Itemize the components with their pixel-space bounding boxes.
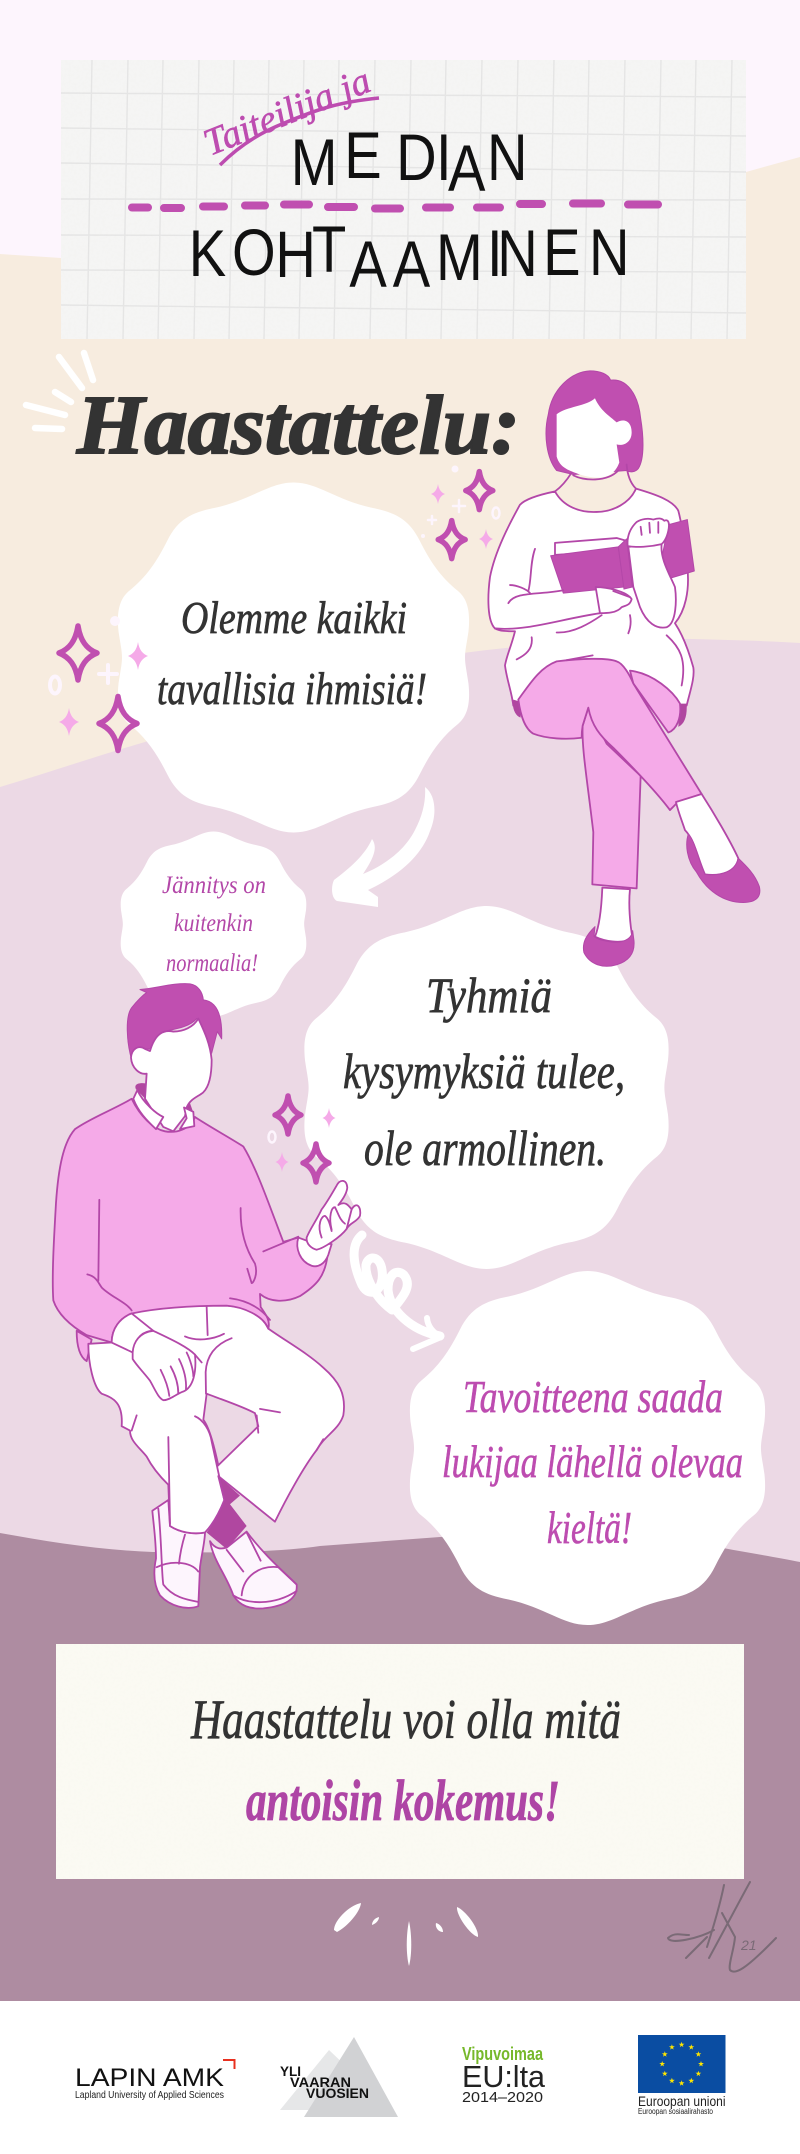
arrow: from bubble 1 to bubble 2 — [332, 787, 434, 907]
logo: Vipuvoimaa EU:lta — [462, 2044, 546, 2106]
closing text line 1: Haastattelu voi olla mitä — [190, 1689, 621, 1751]
bubble 4 text: kieltä! — [547, 1502, 632, 1553]
woman thigh behind and seat shadow — [513, 671, 687, 733]
woman clothing lines — [495, 522, 683, 686]
logo: European Union flag: Euroopan sosiaalirahasto — [638, 2107, 713, 2116]
man sweater lines — [87, 1200, 298, 1320]
man resting hand — [133, 1331, 195, 1400]
man face — [131, 1019, 212, 1131]
title small: Taiteilija ja: Taiteilija ja — [198, 59, 377, 164]
logo: Yli vaaran vuosien: VUOSIEN — [306, 2086, 369, 2101]
bubble 3 text: ole armollinen. — [364, 1120, 606, 1176]
arrow: squiggle to bubble 4 — [354, 1235, 441, 1349]
logo: Vipuvoimaa EU:lta: Vipuvoimaa — [462, 2044, 544, 2064]
bubble 3 text: Tyhmiä — [426, 967, 552, 1023]
bubble 1 text — [157, 592, 427, 714]
title: MEDIAN: MEDIAN — [291, 119, 528, 205]
man hip behind — [77, 1331, 92, 1361]
bubble 2 text: normaalia! — [166, 950, 258, 977]
man raised hand lines — [320, 1207, 352, 1238]
logo: Vipuvoimaa EU:lta: 2014–2020 — [462, 2089, 543, 2106]
artist signature — [668, 1882, 776, 1972]
bubble 4 text — [442, 1371, 743, 1553]
icon: sparkles near woman — [421, 466, 500, 559]
dashed divider — [132, 204, 658, 208]
man trousers — [88, 1306, 344, 1533]
logo: Lapin AMK — [75, 2060, 234, 2101]
logo: Vipuvoimaa EU:lta: EU:lta — [462, 2059, 546, 2094]
bubble 3 text: kysymyksiä tulee, — [343, 1043, 625, 1099]
speech bubble 4 — [410, 1271, 765, 1625]
bubble 1 text: Olemme kaikki — [181, 592, 407, 643]
closing text line 2: antoisin kokemus! — [246, 1768, 560, 1833]
woman face — [557, 398, 632, 478]
man collar — [133, 1090, 194, 1129]
man raised cuff — [297, 1238, 332, 1266]
bubble 2 text — [162, 872, 266, 977]
bubble 2 text: Jännitys on — [162, 872, 266, 899]
man sweater — [53, 1099, 328, 1343]
background: beige wave — [0, 157, 800, 800]
man gap between legs — [203, 1394, 258, 1465]
man hair — [127, 984, 222, 1060]
man raised hand — [307, 1181, 360, 1250]
bubble 3 text — [343, 967, 625, 1176]
man trouser lines — [132, 1307, 323, 1524]
logo: Yli vaaran vuosien — [280, 2037, 398, 2117]
logo: Yli vaaran vuosien: VAARAN — [290, 2075, 351, 2090]
bubble 4 text: Tavoitteena saada — [463, 1371, 723, 1422]
woman forearm and hands — [596, 518, 676, 628]
woman sweater — [488, 489, 694, 706]
decorative white burst — [334, 1903, 478, 1966]
woman book — [551, 520, 694, 593]
icon: sparkles near man — [268, 1096, 336, 1182]
panel: closing message — [56, 1644, 744, 1879]
artist signature: 21 — [740, 1937, 757, 1953]
heading: Haastattelu: Haastattelu: — [76, 379, 520, 472]
man left shoe — [152, 1500, 205, 1608]
bubble 2 text: kuitenkin — [174, 910, 253, 937]
logo: European Union flag — [638, 2035, 726, 2116]
woman turtleneck — [555, 465, 636, 491]
man right shoe — [210, 1532, 297, 1609]
man cuff on knee — [112, 1313, 153, 1352]
speech bubble 1 — [118, 482, 469, 832]
woman ankle left — [595, 888, 633, 942]
woman crossed leg — [518, 659, 702, 810]
woman standing leg — [583, 708, 641, 888]
speech bubble 2 — [121, 832, 306, 1016]
man shoe lines — [157, 1509, 297, 1602]
icon: sparkles left of bubble 1 — [50, 616, 148, 750]
woman ankle right — [676, 794, 738, 875]
logo: Yli vaaran vuosien: YLI — [280, 2064, 301, 2079]
man collar back — [135, 1083, 193, 1113]
man socks — [207, 1476, 247, 1549]
bubble 1 text: tavallisia ihmisiä! — [157, 663, 427, 714]
illustration: woman reading a book — [488, 371, 760, 966]
footer white band — [0, 2001, 800, 2154]
title: KOHTAAMINEN: KOHTAAMINEN — [189, 213, 630, 301]
logo: Lapin AMK: LAPIN AMK — [75, 2064, 224, 2092]
logo: Lapin AMK: Lapland University of Applied Sciences — [75, 2090, 224, 2101]
woman shoe right — [687, 834, 760, 902]
illustration: man gesturing — [53, 984, 360, 1609]
panel: title on grid paper — [61, 59, 746, 339]
woman hair — [546, 371, 643, 475]
woman shoe left — [583, 927, 634, 966]
speech bubble 3 — [304, 906, 669, 1269]
decorative strokes near heading — [26, 353, 93, 429]
background: lilac wave — [0, 639, 800, 1600]
man finger lines — [161, 1352, 193, 1396]
logo: European Union flag: Euroopan unioni — [638, 2093, 726, 2109]
background: mauve wave — [0, 1533, 800, 2001]
